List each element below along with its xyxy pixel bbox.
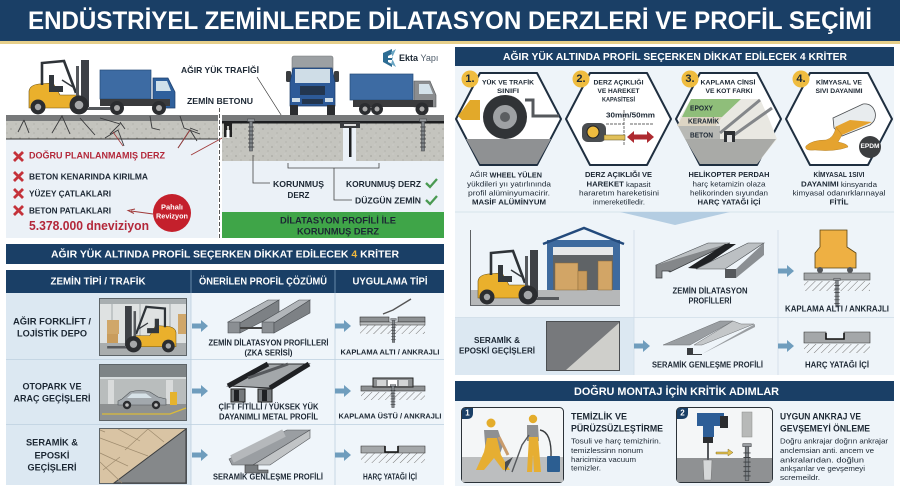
image: car park (100, 364, 186, 420)
logo: Ekta Yapı: Ekta Yapı (399, 53, 438, 63)
text: criterion 4: FİTİL (830, 198, 849, 206)
label: heavy traffic: AĞIR YÜK TRAFİĞİ (181, 64, 259, 75)
row label (459, 335, 535, 356)
section heading: left criteria (6, 244, 444, 264)
badge: 1 (465, 408, 470, 418)
badge: 2 (680, 408, 685, 418)
text: criterion 2: DERZ AÇIKLIĞI VE (585, 170, 652, 179)
arrow (335, 320, 351, 332)
callout brackets (253, 155, 379, 200)
criterion 3: coating type and level: VE KOT FARKI (706, 88, 753, 95)
step 1 text (571, 412, 663, 472)
text: criterion 2: HAREKET kapasit (586, 180, 651, 188)
section heading: installation steps (455, 381, 894, 401)
criterion 3: coating type and level (676, 70, 781, 165)
arrow to cost badge (128, 209, 153, 214)
section heading: left criteria: AĞIR YÜK ALTINDA PROFİL SEÇERKEN DİKKAT EDİLECEK 4 KRİTER (51, 248, 399, 260)
icon: truck side view (350, 74, 436, 116)
badge 2: 2. (576, 73, 586, 85)
row label: EPOSKİ GEÇİŞLERİ (459, 346, 535, 356)
row label: parking: OTOPARK VE (22, 382, 82, 392)
table header: UYGULAMA TİPİ (352, 274, 428, 288)
row label: parking: ARAÇ GEÇİŞLERİ (14, 394, 90, 404)
arrow (778, 340, 794, 352)
pointer line to broken joint (191, 137, 224, 155)
arrow: downward flow triangle (620, 212, 730, 225)
benefit list: DÜZGÜN ZEMİN (355, 196, 421, 206)
caption: HARÇ YATAĞI İÇİ (363, 472, 417, 482)
text: criterion 1 (467, 170, 552, 206)
profile: floor expansion (656, 243, 764, 278)
caption: DAYANIMLI METAL PROFİL (219, 412, 318, 422)
badge 3: 3. (685, 73, 695, 85)
profile: ceramic expansion (663, 321, 755, 355)
arrow (192, 320, 208, 332)
benefit list: KORUNMUŞ DERZ (346, 179, 421, 189)
issue list: BETON KENARINDA KIRILMA (29, 172, 148, 182)
caption (672, 286, 748, 306)
caption: ZEMİN DİLATASYON PROFİLLERİ (208, 338, 328, 348)
step 1 text: haricimiza vacuum (571, 455, 636, 464)
scene: forklift and warehouse (470, 228, 624, 306)
label: floor concrete: ZEMİN BETONU (187, 96, 253, 106)
row label: heavy forklift: LOJİSTİK DEPO (17, 328, 87, 340)
text: criterion 1: profil alüminyumacirir. (468, 188, 550, 198)
arrow (192, 449, 208, 461)
green banner: KORUNMUŞ DERZ (297, 226, 380, 236)
text: criterion 2 (579, 170, 659, 206)
caption: PROFİLLERİ (688, 296, 732, 306)
icon: truck front view (286, 56, 339, 115)
step 1 text: Tosuli ve harç temizhirin. (571, 436, 661, 446)
issue list: BETON PATLAKLARI (29, 206, 111, 216)
green banner: DİLATASYON PROFİLİ İLE (280, 216, 396, 226)
criterion 4: chemical resistance: SIVI DAYANIMI (816, 88, 863, 95)
profile: double seal (228, 364, 309, 402)
criterion 4: chemical resistance: EPDM (860, 144, 880, 150)
caption: (ZKA SERİSİ) (244, 348, 293, 358)
table header: ZEMİN TİPİ / TRAFİK (50, 274, 146, 288)
text: criterion 3: harç ketamizin olaza (692, 180, 766, 188)
step 2 text: GEVŞEMEYİ ÖNLEME (780, 424, 870, 434)
arrow (634, 340, 650, 352)
criterion 3: coating type and level: KAPLAMA CİNSİ (700, 78, 756, 86)
caption (208, 338, 328, 358)
criterion 2: joint gap and movement: KAPASİTESİ (602, 96, 635, 104)
step 2 text (780, 412, 889, 482)
step 2 illustration (676, 408, 772, 482)
criterion 2: joint gap and movement (566, 70, 671, 165)
caption: SERAMİK GENLEŞME PROFİLİ (652, 360, 763, 370)
text: criterion 3: HELİKOPTER PERDAH (688, 170, 770, 179)
criterion 2: joint gap and movement: 30mm/50mm (606, 110, 655, 120)
criterion 4: chemical resistance: KİMYASAL VE (816, 78, 863, 86)
table header: ÖNERİLEN PROFİL ÇÖZÜMÜ (199, 274, 327, 288)
caption: HARÇ YATAĞI İÇİ (805, 360, 869, 370)
arrow (335, 449, 351, 461)
issue list (14, 150, 165, 233)
criterion 3: coating type and level: BETON (690, 132, 713, 140)
step 1 text: temizler. (571, 464, 601, 472)
panel: recommended solutions (455, 212, 894, 375)
step 1 text: TEMİZLİK VE (571, 412, 627, 422)
title: ENDÜSTRİYEL ZEMİNLERDE DİLATASYON DERZLERİ VE PROFİL SEÇİMİ (28, 6, 872, 35)
badge 1: 1. (465, 73, 475, 85)
image: forklift in warehouse (100, 298, 186, 356)
text: criterion 1: MASİF ALÜMİNYUM (472, 198, 546, 206)
issue list: 5.378.000 dneviziyon (29, 219, 149, 233)
section heading: installation steps: DOĞRU MONTAJ İÇİN KRİTİK ADIMLAR (574, 385, 779, 398)
profile: ZKA floor expansion (228, 300, 310, 333)
badge: expensive revision: Pahalı (161, 204, 183, 212)
icon: blue delivery truck (100, 70, 175, 115)
row label: heavy forklift: AĞIR FORKLİFT / (13, 316, 91, 328)
icon: forklift on damaged floor (29, 60, 110, 114)
leader line (257, 77, 283, 118)
caption: ÇİFT FİTİLLİ / YÜKSEK YÜK (218, 402, 319, 412)
text: criterion 4: kimyasal odanırklarınayal (792, 188, 886, 198)
issue list: DOĞRU PLANLANMAMIŞ DERZ (29, 150, 165, 162)
criterion 4: chemical resistance (786, 70, 892, 165)
step 2 text: ankralarıdan. doğlun (780, 456, 864, 464)
table: profile selection (6, 270, 444, 485)
text: criterion 1: yükdileri yıı yatırlınında (467, 180, 552, 188)
criterion 3: coating type and level: KERAMİK (688, 118, 719, 126)
text: criterion 1: AĞIR WHEEL YÜLEN (470, 170, 542, 179)
text: criterion 3: HARÇ YATAĞI İÇİ (698, 198, 760, 206)
label: protected joint: KORUNMUŞ (273, 179, 324, 189)
title band (0, 0, 900, 44)
application: mortar bed (804, 332, 870, 353)
step 1 text: temizlessinn nonum (571, 446, 643, 455)
label: protected joint (273, 179, 324, 200)
text: criterion 3: helikorinden sıyundan (690, 188, 768, 198)
step 2 text: ankşarılar ve gevşemeyi (780, 464, 865, 473)
caption: ZEMİN DİLATASYON (672, 286, 748, 296)
caption: KAPLAMA ALTI / ANKRAJLI (785, 304, 889, 314)
text: criterion 3 (688, 170, 770, 206)
benefit list (346, 179, 437, 206)
panel: wrong joint, left side comparison (6, 60, 224, 238)
application: under coating anchored (360, 299, 425, 342)
criterion 3: coating type and level: EPOXY (690, 106, 713, 112)
image: epoxy and ceramic floor (546, 322, 620, 370)
panel: protected joint, right side comparison (181, 49, 444, 238)
text: criterion 2: hararetım hareketisini (579, 188, 659, 198)
step 1 text: PÜRÜZSÜZLEŞTİRME (571, 424, 663, 434)
arrow (335, 385, 351, 397)
criterion 1: load and traffic class: SINIFI (497, 88, 519, 95)
application: over coating anchored (361, 378, 425, 408)
criterion 2: joint gap and movement: VE HAREKET (598, 88, 640, 95)
step 2 text: Doğru ankrajar doğrın ankrajar (780, 436, 889, 446)
badge: expensive revision (153, 194, 191, 232)
row label: ceramic and epoxy (26, 438, 78, 474)
text: criterion 4: KİMYASAL 1SIVI (814, 170, 864, 179)
text: criterion 4 (792, 170, 886, 206)
arrow (778, 265, 794, 277)
text: criterion 2: inmereketilledir. (593, 198, 645, 206)
row label: SERAMİK & (474, 335, 520, 345)
step 2 text: anclemsian anti. ancem ve (780, 446, 874, 455)
row label: parking (14, 382, 90, 404)
caption (218, 402, 319, 422)
row label: ceramic and epoxy: GEÇİŞLERİ (28, 462, 76, 474)
caption: SERAMİK GENLEŞME PROFİLİ (213, 472, 323, 482)
caption: KAPLAMA ÜSTÜ / ANKRAJLI (338, 412, 442, 420)
row label: ceramic and epoxy: EPOSKİ (34, 450, 70, 462)
step 2 text: scremeildr. (780, 473, 820, 482)
green banner (222, 212, 444, 238)
issue list: YÜZEY ÇATLAKLARI (29, 188, 111, 198)
badge 4: 4. (796, 73, 806, 85)
profile: ceramic expansion (229, 430, 310, 473)
zemin divider (218, 108, 220, 238)
table header (6, 270, 444, 293)
cracked concrete slab (6, 115, 218, 148)
criterion 1: load and traffic class (456, 70, 561, 165)
row label: ceramic and epoxy: SERAMİK & (26, 438, 78, 448)
protected concrete slab with joint profile (222, 115, 444, 161)
criterion 1: load and traffic class: YÜK VE TRAFİK (482, 78, 534, 86)
label: protected joint: DERZ (288, 190, 310, 200)
text: criterion 4: DAYANIMI kinsyarıda (801, 180, 878, 188)
step 1 illustration (462, 408, 564, 482)
panel: four criteria (455, 66, 894, 212)
badge: expensive revision: Revizyon (156, 214, 188, 220)
step 2 text: UYGUN ANKRAJ VE (780, 412, 861, 422)
section heading: right criteria: AĞIR YÜK ALTINDA PROFİL SEÇERKEN DİKKAT EDİLECEK 4 KRİTER (503, 50, 847, 63)
application: mortar bed (361, 446, 425, 463)
application: load on anchored profile (804, 230, 870, 307)
section heading: right criteria (455, 47, 894, 66)
image: ceramic to epoxy floor (100, 428, 186, 484)
criterion 2: joint gap and movement: DERZ AÇIKLIĞI (594, 78, 644, 86)
logo: Ekta Yapı (383, 49, 438, 67)
panel: installation steps (455, 401, 894, 486)
caption: KAPLAMA ALTI / ANKRAJLI (340, 348, 440, 356)
arrow (192, 385, 208, 397)
row label: heavy forklift (13, 316, 91, 340)
